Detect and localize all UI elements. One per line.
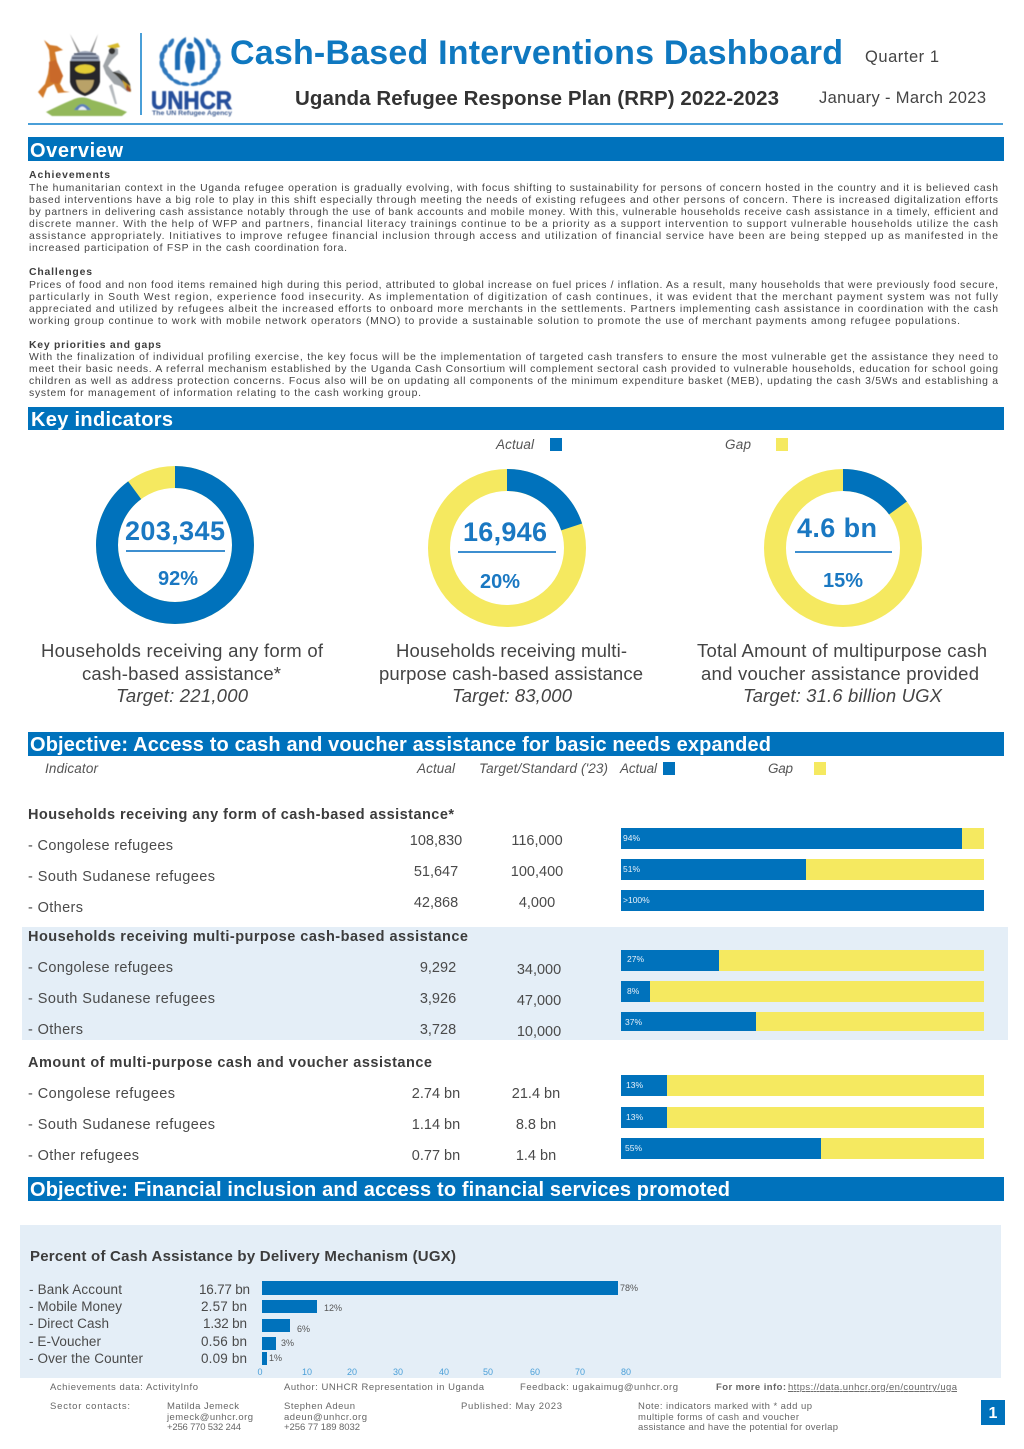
header [28, 33, 1003, 125]
table group: any form of cash-based assistance: - South Sudanese refugees [28, 869, 215, 885]
table group: any form of cash-based assistance: 100,400 [511, 864, 563, 880]
bar chart: delivery mechanisms: 3% [281, 1338, 294, 1348]
quarter label: Quarter 1 [865, 48, 939, 66]
table group: multi-purpose cash-based assistance: - South Sudanese refugees [28, 991, 215, 1007]
table group: multi-purpose cash-based assistance [22, 927, 1008, 1040]
table group: multi-purpose cash-based assistance: 47,000 [517, 993, 561, 1009]
donut caption: multi-purpose [379, 640, 643, 706]
footer: +256 770 532 244 [167, 1422, 241, 1433]
bar chart: delivery mechanisms [29, 1281, 638, 1377]
table group: any form of cash-based assistance: 4,000 [519, 895, 555, 911]
footer: Author: UNHCR Representation in Uganda [284, 1382, 485, 1393]
footer: +256 77 189 8032 [284, 1422, 360, 1433]
subtitle: Uganda Refugee Response Plan (RRP) 2022-2023 [295, 87, 779, 110]
panel: delivery mechanism [20, 1225, 1001, 1378]
logo tagline: The UN Refugee Agency [152, 111, 233, 117]
text block: overview [28, 170, 999, 399]
table group: any form of cash-based assistance: 42,868 [414, 895, 458, 911]
chart heading: Percent of Cash Assistance by Delivery Mechanism (UGX) [30, 1248, 456, 1265]
section heading: key indicators: Key indicators [31, 409, 173, 431]
legend: key indicators: Actual [495, 437, 535, 452]
achievements [29, 170, 998, 254]
bar: south sudanese 51%: 51% [623, 864, 640, 874]
bar: others 55% [621, 1138, 984, 1159]
table group: amount of multi-purpose cash and voucher assistance: 21.4 bn [512, 1086, 560, 1102]
bar: others 55%: 55% [625, 1143, 642, 1153]
page number [981, 1400, 1005, 1425]
donut caption: any form: Households receiving any form of [41, 640, 324, 661]
bar chart: delivery mechanisms: - Over the Counter [29, 1351, 144, 1366]
donut caption: multi-purpose: Households receiving multi- [396, 640, 627, 661]
bar: south sudanese 13%: 13% [626, 1112, 643, 1122]
achievements: assistance appropriately. Initiatives to improve refugee financial inclusion through access and utilization of financial service have been are being stepped up as manifested in the [29, 231, 998, 242]
bar chart: delivery mechanisms: 0.56 bn [201, 1334, 247, 1349]
section heading: objective basic needs: Objective: Access to cash and voucher assistance for basic needs expanded [30, 734, 771, 756]
footer [50, 1382, 958, 1433]
bar: congolese 13%: 13% [626, 1080, 643, 1090]
bar chart: delivery mechanisms: 0.09 bn [201, 1351, 247, 1366]
legend: key indicators [495, 437, 788, 452]
footer: Feedback: ugakaimug@unhcr.org [520, 1382, 678, 1393]
date range: January - March 2023 [819, 89, 986, 107]
key priorities and gaps: meet their basic needs. A referral mechanism established by the Uganda Cash Consortium will complement sectoral cash provided to vulnerable households, education for school going [29, 364, 998, 375]
table group: any form of cash-based assistance [28, 807, 984, 916]
bar: others above 100% [621, 890, 984, 911]
table group: amount of multi-purpose cash and voucher assistance: 8.8 bn [516, 1117, 556, 1133]
table group: any form of cash-based assistance: - Others [28, 900, 83, 916]
bar chart: delivery mechanisms: 6% [297, 1324, 310, 1334]
table group: any form of cash-based assistance: Households receiving any form of cash-based assistance* [28, 807, 454, 823]
footer: Note: indicators marked with * add up [638, 1401, 812, 1412]
table header: Actual [416, 761, 456, 776]
table group: amount of multi-purpose cash and voucher assistance: Amount of multi-purpose cash and voucher assistance [28, 1055, 432, 1071]
footer: For more info: [716, 1382, 786, 1393]
bar chart: delivery mechanisms: 1% [269, 1353, 282, 1363]
bar: south sudanese 51% [621, 859, 984, 880]
footer: https://data.unhcr.org/en/country/uga [788, 1382, 958, 1393]
bar chart: delivery mechanisms: 60 [530, 1367, 540, 1377]
donut caption: total amount [697, 640, 987, 706]
section heading: overview: Overview [30, 140, 123, 162]
bar chart: delivery mechanisms: 20 [347, 1367, 357, 1377]
section heading: key indicators [28, 407, 1004, 431]
section heading: objective basic needs [28, 732, 1004, 756]
table group: multi-purpose cash-based assistance: 3,926 [420, 991, 456, 1007]
footer: Sector contacts: [50, 1401, 130, 1412]
bar chart: delivery mechanisms: 80 [621, 1367, 631, 1377]
donut chart: households receiving any form [107, 477, 243, 613]
key priorities and gaps [29, 340, 998, 399]
challenges: particularly in South West region, experience food insecurity. As implementation of digitization of cash continues, it was evident that the merchant payment system was not fully [29, 292, 999, 303]
table header: Actual [619, 761, 658, 776]
table group: amount of multi-purpose cash and voucher assistance: - South Sudanese refugees [28, 1117, 215, 1133]
bar chart: delivery mechanisms: - Mobile Money [29, 1299, 122, 1314]
donut caption: multi-purpose: Target: 83,000 [452, 685, 573, 706]
section heading: overview [28, 137, 1004, 162]
bar chart: delivery mechanisms: 40 [439, 1367, 449, 1377]
achievements: The humanitarian context in the Uganda refugee operation is gradually evolving, with focus shifting to sustainability for persons of concern hosted in the country and it is believed cash [29, 183, 998, 194]
section heading: objective financial inclusion: Objective: Financial inclusion and access to financial services promoted [30, 1179, 730, 1201]
bar chart: delivery mechanisms: - Bank Account [29, 1282, 122, 1297]
donut chart: households receiving any form: 203,345 [125, 516, 225, 546]
challenges: working group continue to work with mobile network operators (MNO) to provide a sustainable solution to promote the use of merchant payments among refugee populations. [28, 316, 960, 327]
donut chart: total amount: 4.6 bn [797, 513, 877, 543]
donut caption: total amount: Target: 31.6 billion UGX [743, 685, 943, 706]
page number: 1 [989, 1405, 998, 1422]
bar: congolese 27%: 27% [627, 954, 644, 964]
table group: any form of cash-based assistance: - Congolese refugees [28, 838, 173, 854]
donut caption: any form: cash-based assistance* [82, 663, 281, 684]
bar: south sudanese 13% [621, 1107, 984, 1128]
achievements: by partners in delivering cash assistance notably through the use of bank accounts and mobile money. With this, vulnerable households receive cash assistance in a timely, efficient and [29, 207, 998, 218]
key priorities and gaps: Key priorities and gaps [29, 340, 161, 351]
donut chart: total amount [775, 480, 911, 616]
table group: amount of multi-purpose cash and voucher assistance: 0.77 bn [412, 1148, 460, 1164]
donut chart: multi-purpose households: 20% [480, 571, 520, 593]
table group: amount of multi-purpose cash and voucher assistance: - Other refugees [28, 1148, 139, 1164]
table group: multi-purpose cash-based assistance: 10,000 [517, 1024, 561, 1040]
table group: amount of multi-purpose cash and voucher assistance: 1.4 bn [516, 1148, 556, 1164]
bar: others 37%: 37% [625, 1017, 642, 1027]
bar chart: delivery mechanisms: 50 [483, 1367, 493, 1377]
bar: congolese 27% [621, 950, 984, 971]
donut chart: households receiving any form: 92% [158, 568, 198, 590]
footer: assistance and have the potential for overlap [638, 1422, 838, 1433]
table group: any form of cash-based assistance: 108,830 [410, 833, 462, 849]
table group: multi-purpose cash-based assistance: - Congolese refugees [28, 960, 173, 976]
icon: UNHCR emblem [159, 37, 221, 87]
challenges: Challenges [29, 267, 92, 278]
table header: Indicator [45, 761, 98, 776]
key priorities and gaps: children as well as address protection concerns. Focus also will be on updating all components of the minimum expenditure basket (MEB), updating the cash 3/5Ws and establishing a [29, 376, 998, 387]
table group: amount of multi-purpose cash and voucher assistance: 1.14 bn [412, 1117, 460, 1133]
table group: multi-purpose cash-based assistance: 9,292 [420, 960, 456, 976]
footer: Stephen Adeun [284, 1401, 355, 1412]
bar chart: delivery mechanisms: - Direct Cash [29, 1316, 109, 1331]
challenges [28, 267, 999, 327]
bar chart: delivery mechanisms: 12% [324, 1303, 342, 1313]
donut caption: any form: Target: 221,000 [116, 685, 249, 706]
bar: others 37% [621, 1012, 984, 1031]
donut caption: total amount: and voucher assistance provided [701, 663, 979, 684]
achievements: based interventions have a big role to play in this shift especially through meeting the needs of existing refugees and other persons of concern. There is increased digitalization efforts [29, 195, 998, 206]
key priorities and gaps: system for management of information relating to the cash working group. [29, 388, 421, 399]
bar chart: delivery mechanisms: 16.77 bn [199, 1282, 250, 1297]
table group: amount of multi-purpose cash and voucher assistance [28, 1055, 984, 1164]
table header: Target/Standard ('23) [479, 761, 608, 776]
bar chart: delivery mechanisms: 1.32 bn [203, 1316, 247, 1331]
bar chart: delivery mechanisms: 78% [620, 1283, 638, 1293]
bar chart: delivery mechanisms: 70 [575, 1367, 585, 1377]
donut caption: total amount: Total Amount of multipurpose cash [697, 640, 987, 661]
achievements: Achievements [29, 170, 110, 181]
table group: any form of cash-based assistance: 116,000 [511, 833, 563, 849]
footer: multiple forms of cash and voucher [638, 1412, 799, 1423]
challenges: Prices of food and non food items remained high during this period, attributed to global increase on fuel prices / inflation. As a result, many households that were previously food secure, [29, 280, 998, 291]
donut chart: multi-purpose households [439, 480, 575, 616]
table header [45, 761, 826, 776]
logo wordmark: UNHCR [151, 87, 232, 115]
footer: Achievements data: ActivityInfo [50, 1382, 198, 1393]
challenges: appreciated and utilized by refugees albeit the increased efforts to onboard more merchants in the settlements. Partners implementing cash assistance in coordination with the cash [29, 304, 998, 315]
legend: key indicators: Gap [725, 437, 751, 452]
logo: UNHCR [151, 37, 233, 117]
table group: amount of multi-purpose cash and voucher assistance: 2.74 bn [412, 1086, 460, 1102]
footer: Published: May 2023 [461, 1401, 562, 1412]
bar: south sudanese 8% [621, 981, 984, 1002]
footer: adeun@unhcr.org [284, 1412, 367, 1423]
bar chart: delivery mechanisms: 2.57 bn [201, 1299, 247, 1314]
bar chart: delivery mechanisms: - E-Voucher [29, 1334, 102, 1349]
donut caption: any form [41, 640, 324, 706]
achievements: increased participation of FSP in the cash coordination fora. [29, 243, 347, 254]
key priorities and gaps: With the finalization of individual profiling exercise, the key focus will be the implementation of targeted cash transfers to ensure the most vulnerable get the assistance they need to [29, 352, 998, 363]
table group: multi-purpose cash-based assistance: 34,000 [517, 962, 561, 978]
bar chart: delivery mechanisms: 0 [257, 1367, 263, 1377]
bar: congolese 13% [621, 1075, 984, 1096]
section heading: objective financial inclusion [28, 1177, 1004, 1201]
bar: others above 100%: >100% [623, 895, 650, 905]
donut caption: multi-purpose: purpose cash-based assistance [379, 663, 643, 684]
table header: Gap [768, 761, 793, 776]
table group: any form of cash-based assistance: 51,647 [414, 864, 458, 880]
footer: jemeck@unhcr.org [166, 1412, 253, 1423]
table group: multi-purpose cash-based assistance: Households receiving multi-purpose cash-based assistance [28, 929, 468, 945]
bar: south sudanese 8%: 8% [627, 986, 640, 996]
divider [140, 33, 142, 115]
table group: multi-purpose cash-based assistance: 3,728 [420, 1022, 456, 1038]
footer: Matilda Jemeck [167, 1401, 239, 1412]
table group: amount of multi-purpose cash and voucher assistance: - Congolese refugees [28, 1086, 175, 1102]
bar chart: delivery mechanisms: 30 [393, 1367, 403, 1377]
bar chart: delivery mechanisms: 10 [302, 1367, 312, 1377]
icon: Uganda coat of arms [38, 34, 131, 116]
donut chart: total amount: 15% [823, 570, 863, 592]
bar: congolese 94% [621, 828, 984, 849]
donut chart: multi-purpose households: 16,946 [463, 517, 547, 547]
title: Cash-Based Interventions Dashboard [230, 34, 843, 72]
bar: congolese 94%: 94% [623, 833, 640, 843]
table group: multi-purpose cash-based assistance: - Others [28, 1022, 83, 1038]
achievements: discrete manner. With the help of WFP and partners, financial literacy trainings continue to be a priority as a support intervention to support vulnerable households utilize the cash [29, 219, 998, 230]
